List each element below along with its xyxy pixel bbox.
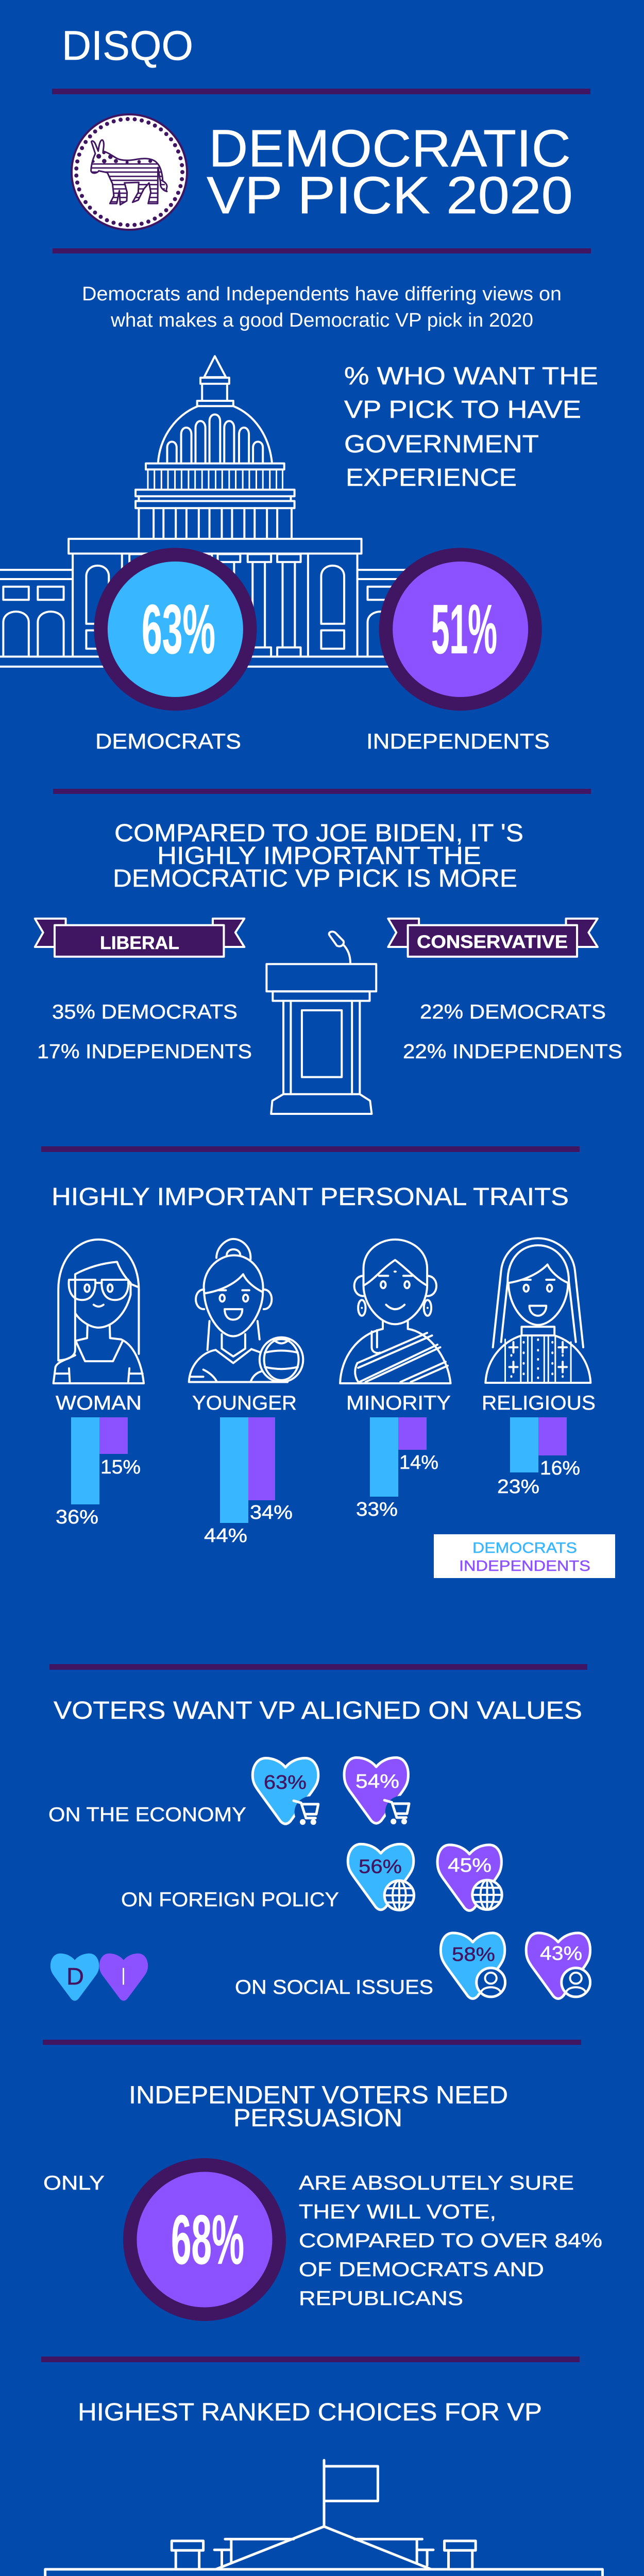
heading: independent voters: PERSUASION (233, 2105, 402, 2132)
icon: White House (35, 2460, 613, 2576)
stat circle: Independents 51% (379, 548, 542, 710)
label: woman: WOMAN (56, 1392, 142, 1414)
bar chart: younger: 44% (204, 1525, 247, 1547)
heading: independent voters (129, 2081, 508, 2132)
icon: Democratic donkey badge (72, 114, 187, 230)
heart: Independents social issues (526, 1933, 590, 1998)
heading: highest ranked choices: HIGHEST RANKED CHOICES FOR VP (78, 2399, 542, 2426)
legend hearts: D and I (50, 1954, 148, 2001)
logo: DISQO top: DISQO (62, 23, 193, 69)
bar chart: religious: 23% (497, 1476, 539, 1498)
icon: woman with glasses (54, 1240, 144, 1383)
label: Independents: INDEPENDENTS (366, 729, 550, 753)
bar chart: minority (356, 1417, 438, 1520)
heart: Independents economy (344, 1758, 418, 1827)
bar chart: religious: 16% (540, 1458, 580, 1479)
conservative stats: 22% INDEPENDENTS (403, 1041, 622, 1063)
bar chart: woman (56, 1417, 141, 1528)
heart: Independents foreign policy: 45% (448, 1855, 492, 1876)
bar chart: woman: 36% (56, 1506, 98, 1528)
bar chart: woman: 15% (100, 1456, 141, 1478)
icon: podium with microphone (266, 931, 376, 1114)
label: minority: MINORITY (346, 1392, 451, 1414)
legend: traits: DEMOCRATS (472, 1540, 577, 1556)
heading: government experience (344, 363, 598, 492)
ribbon: conservative: CONSERVATIVE (417, 932, 568, 952)
divider bar below title (53, 248, 591, 253)
icon: religious woman with veil (485, 1238, 590, 1383)
legend hearts: D and I: I (122, 1963, 125, 1990)
heading: independent voters: INDEPENDENT VOTERS NEED (129, 2081, 508, 2109)
stat circle: 68% (123, 2158, 286, 2321)
text: absolutely sure: OF DEMOCRATS AND (299, 2259, 544, 2281)
liberal stats: 17% INDEPENDENTS (37, 1041, 252, 1063)
icon: younger woman with volleyball (189, 1239, 303, 1382)
divider bar (49, 1664, 587, 1670)
label: religious: RELIGIOUS (482, 1392, 596, 1414)
conservative stats (403, 1001, 622, 1063)
bar chart: religious (497, 1417, 580, 1498)
ribbon: conservative (388, 919, 598, 957)
liberal stats: 35% DEMOCRATS (52, 1001, 238, 1023)
title: VP PICK 2020 (207, 166, 573, 225)
text: absolutely sure: ARE ABSOLUTELY SURE (299, 2172, 574, 2194)
heading: government experience: EXPERIENCE (346, 464, 517, 492)
stat circle: Democrats 63% (94, 548, 257, 710)
heart: Independents foreign policy (437, 1845, 502, 1910)
legend: traits (434, 1534, 615, 1578)
legend: traits: INDEPENDENTS (459, 1558, 590, 1574)
liberal stats (37, 1001, 252, 1063)
icon: minority woman in sari (340, 1240, 451, 1383)
label: Democrats: DEMOCRATS (95, 729, 241, 753)
heart: Democrats social issues (440, 1933, 505, 1998)
heading: values: VOTERS WANT VP ALIGNED ON VALUES (54, 1697, 582, 1724)
bar chart: younger: 34% (250, 1502, 293, 1523)
heart: Independents social issues: 43% (540, 1943, 582, 1964)
heading: compared to Joe Biden: COMPARED TO JOE BIDEN, IT 'S (114, 820, 523, 847)
text: absolutely sure: COMPARED TO OVER 84% (299, 2230, 602, 2252)
heading: government experience: % WHO WANT THE (344, 363, 598, 390)
label: younger: YOUNGER (192, 1392, 297, 1414)
text: absolutely sure: THEY WILL VOTE, (299, 2201, 496, 2223)
heading: compared to Joe Biden: DEMOCRATIC VP PICK IS MORE (113, 865, 517, 892)
icon: capitol building (0, 356, 430, 667)
heart: Democrats economy (252, 1758, 327, 1828)
bar chart: minority: 14% (399, 1452, 438, 1473)
divider bar top (52, 89, 590, 94)
heading: compared to Joe Biden: HIGHLY IMPORTANT THE (157, 842, 481, 870)
heart: Democrats foreign policy: 56% (359, 1856, 402, 1877)
divider bar (53, 789, 591, 794)
heading: government experience: VP PICK TO HAVE (344, 396, 581, 423)
ribbon: liberal: LIBERAL (100, 933, 179, 953)
stat circle: 68%: 68% (171, 2200, 244, 2279)
title: DEMOCRATIC (209, 119, 571, 178)
subtitle (82, 283, 562, 331)
bar chart: minority: 33% (356, 1499, 398, 1520)
conservative stats: 22% DEMOCRATS (420, 1001, 606, 1023)
title (207, 119, 573, 225)
divider bar (41, 1146, 580, 1152)
label: on social issues: ON SOCIAL ISSUES (235, 1976, 433, 1998)
heart: Democrats social issues: 58% (452, 1944, 495, 1965)
heading: government experience: GOVERNMENT (344, 431, 539, 458)
text: absolutely sure: REPUBLICANS (299, 2287, 463, 2310)
text: only: ONLY (43, 2172, 105, 2194)
heart: Independents economy: 54% (355, 1771, 399, 1792)
divider bar (41, 2357, 580, 2362)
subtitle: Democrats and Independents have differing views on (82, 283, 562, 305)
legend hearts: D and I: D (66, 1963, 84, 1990)
heart: Democrats foreign policy (348, 1844, 414, 1910)
heading: personal traits: HIGHLY IMPORTANT PERSONAL TRAITS (52, 1183, 569, 1211)
text: absolutely sure (299, 2172, 602, 2310)
heading: compared to Joe Biden (113, 820, 523, 892)
stat circle: Independents 51%: 51% (431, 590, 497, 668)
ribbon: liberal (35, 919, 244, 957)
divider bar (43, 2040, 581, 2045)
bar chart: younger (204, 1417, 293, 1547)
subtitle: what makes a good Democratic VP pick in 2020 (110, 310, 533, 331)
heart: Democrats economy: 63% (264, 1772, 307, 1793)
label: on the economy: ON THE ECONOMY (48, 1804, 246, 1826)
label: on foreign policy: ON FOREIGN POLICY (121, 1889, 339, 1911)
stat circle: Democrats 63%: 63% (142, 590, 215, 668)
